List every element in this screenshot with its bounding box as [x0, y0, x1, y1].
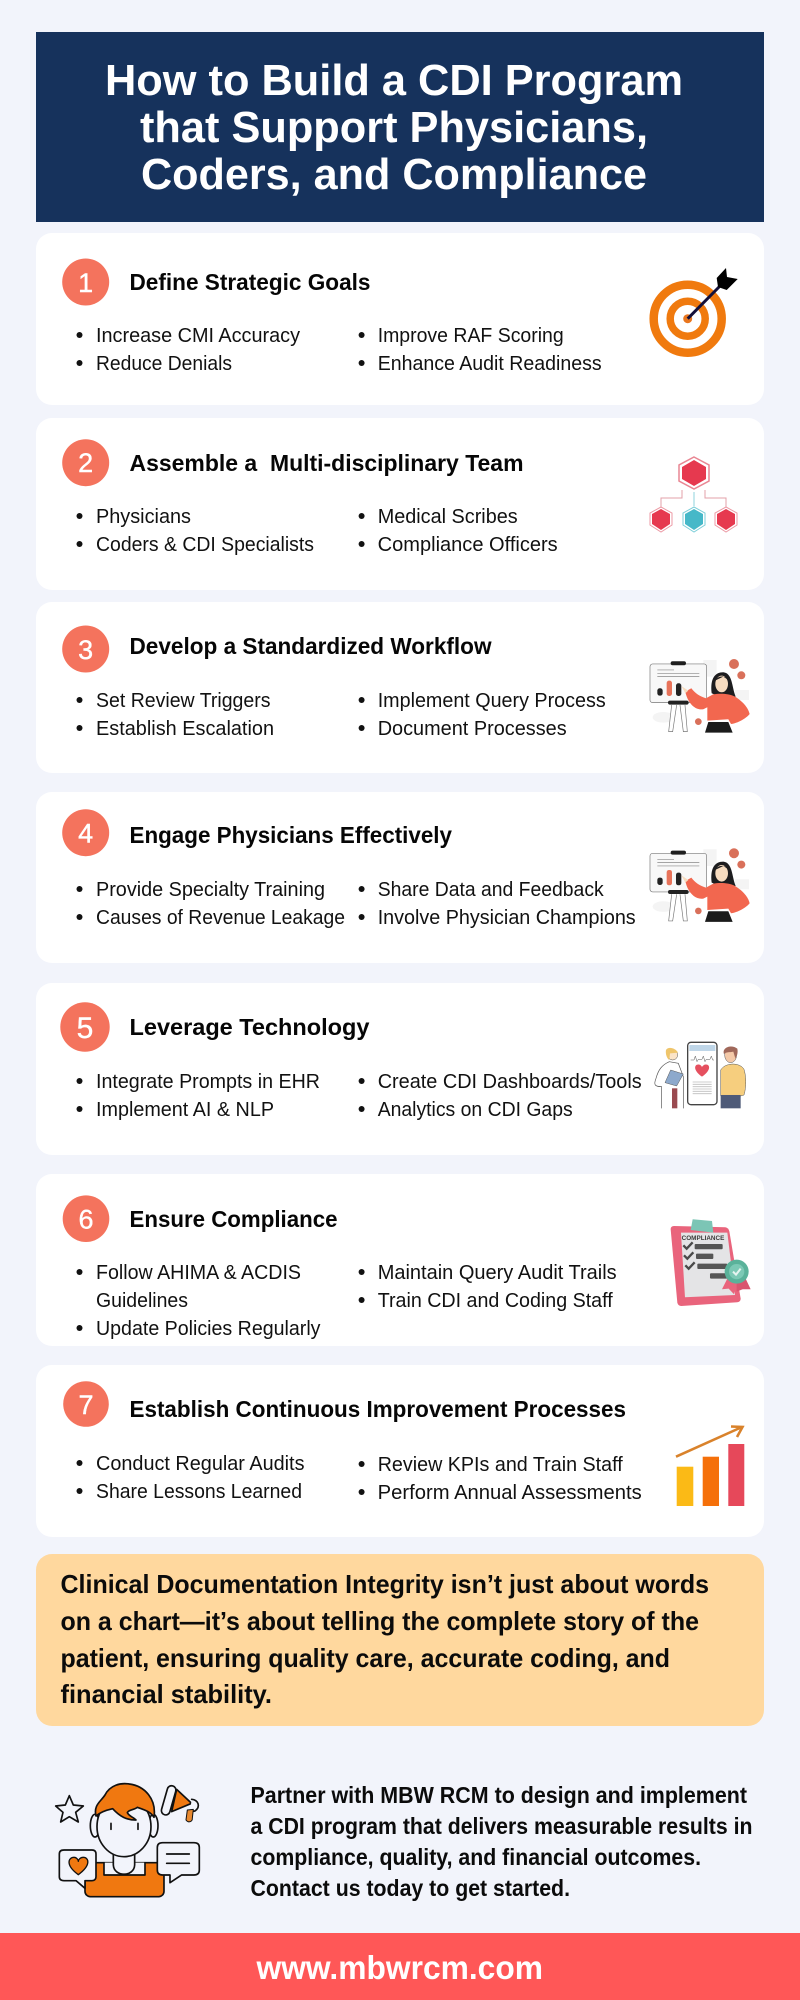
bullet list: step 2: Coders & CDI Specialists [96, 534, 314, 556]
number badge 3 [62, 626, 109, 672]
bullet list: step 1: Enhance Audit Readiness [378, 353, 602, 375]
bullet list: step 4 [76, 879, 636, 929]
bullet list: step 5: Implement AI & NLP [96, 1099, 274, 1121]
icon: doctor and patient with EHR phone [655, 1042, 746, 1108]
bullet list: step 1: Improve RAF Scoring [378, 325, 564, 347]
bullet list: step 4: Causes of Revenue Leakage [96, 907, 345, 929]
icon: presenter at chart board [650, 848, 750, 922]
title banner: Coders, and Compliance [141, 150, 647, 199]
number badge 1 [62, 258, 109, 306]
bullet list: step 4: Provide Specialty Training [96, 879, 325, 901]
number badge 2 [62, 439, 109, 486]
bullet list: step 5 [76, 1071, 642, 1121]
number badge 5 [60, 1002, 110, 1052]
number badge 6 [63, 1195, 109, 1242]
number badge 5: 5 [77, 1012, 93, 1045]
panel: step 1 define strategic goals [36, 233, 764, 405]
number badge 3: 3 [78, 635, 93, 665]
heading: step 7: Establish Continuous Improvement Processes [130, 1396, 626, 1422]
number badge 4 [62, 809, 109, 856]
bullet list: step 2: Physicians [96, 506, 191, 528]
bullet list: step 6: Guidelines [96, 1290, 188, 1312]
bullet list: step 7: Perform Annual Assessments [378, 1482, 642, 1504]
call to action text: Partner with MBW RCM to design and implement [250, 1782, 747, 1808]
icon: presenter at chart board [650, 659, 750, 733]
call to action text: Contact us today to get started. [250, 1875, 570, 1901]
bullet list: step 7: Review KPIs and Train Staff [378, 1454, 623, 1476]
bullet list: step 4: Involve Physician Champions [378, 907, 636, 929]
bullet list: step 5: Analytics on CDI Gaps [378, 1099, 573, 1121]
call to action text [250, 1782, 752, 1901]
icon: compliance clipboard with medal: COMPLIANCE [682, 1235, 724, 1242]
number badge 6: 6 [78, 1205, 94, 1235]
icon: person with speech bubbles and megaphone [56, 1784, 199, 1897]
callout: CDI quote [36, 1554, 764, 1726]
bullet list: step 6 [76, 1262, 617, 1340]
heading: step 6: Ensure Compliance [130, 1206, 338, 1232]
panel: step 3 standardized workflow [36, 602, 764, 773]
bullet list: step 7: Conduct Regular Audits [96, 1453, 304, 1475]
bullet list: step 1: Reduce Denials [96, 353, 232, 375]
bullet list: step 5: Create CDI Dashboards/Tools [378, 1071, 642, 1093]
bullet list: step 1 [76, 325, 602, 375]
callout: CDI quote: Clinical Documentation Integrity isn’t just about words [60, 1569, 709, 1599]
panel: step 6 ensure compliance [36, 1174, 764, 1346]
icon: rising bar chart with arrow [676, 1426, 744, 1506]
heading: step 4: Engage Physicians Effectively [130, 822, 452, 848]
bullet list: step 1: Increase CMI Accuracy [96, 325, 300, 347]
number badge 4: 4 [78, 819, 93, 849]
panel: step 2 assemble team [36, 418, 764, 590]
bullet list: step 3: Set Review Triggers [96, 690, 270, 712]
icon: compliance clipboard with medal [671, 1219, 751, 1306]
footer bar with website [0, 1933, 800, 2000]
call to action text: a CDI program that delivers measurable results in [250, 1813, 752, 1839]
panel: step 7 continuous improvement [36, 1365, 764, 1537]
icon: hexagon org network [650, 457, 737, 532]
heading: step 3: Develop a Standardized Workflow [130, 633, 492, 659]
title banner: How to Build a CDI Program [105, 56, 683, 105]
panel: step 5 leverage technology [36, 983, 764, 1155]
bullet list: step 3 [76, 690, 606, 740]
icon: target with dart [654, 268, 738, 353]
footer bar with website: www.mbwrcm.com [256, 1949, 543, 1986]
number badge 2: 2 [78, 448, 93, 478]
bullet list: step 3: Establish Escalation [96, 718, 274, 740]
bullet list: step 7: Share Lessons Learned [96, 1481, 302, 1503]
bullet list: step 3: Document Processes [378, 718, 567, 740]
callout: CDI quote: patient, ensuring quality care, accurate coding, and [60, 1643, 670, 1673]
title banner [36, 32, 764, 222]
bullet list: step 3: Implement Query Process [378, 690, 606, 712]
heading: step 5: Leverage Technology [130, 1014, 370, 1040]
bullet list: step 6: Update Policies Regularly [96, 1318, 320, 1340]
bullet list: step 2 [76, 506, 558, 556]
call to action text: compliance, quality, and financial outcomes. [250, 1844, 701, 1870]
bullet list: step 6: Train CDI and Coding Staff [378, 1290, 613, 1312]
bullet list: step 4: Share Data and Feedback [378, 879, 605, 901]
bullet list: step 2: Medical Scribes [378, 506, 518, 528]
bullet list: step 2: Compliance Officers [378, 534, 558, 556]
number badge 7: 7 [78, 1390, 94, 1420]
bullet list: step 6: Maintain Query Audit Trails [378, 1262, 617, 1284]
bullet list: step 6: Follow AHIMA & ACDIS [96, 1262, 301, 1284]
number badge 1: 1 [78, 268, 93, 298]
callout: CDI quote: on a chart—it’s about telling the complete story of the [60, 1606, 699, 1636]
callout: CDI quote: financial stability. [60, 1679, 272, 1709]
title banner: that Support Physicians, [140, 103, 648, 152]
bullet list: step 7 [76, 1453, 642, 1504]
bullet list: step 5: Integrate Prompts in EHR [96, 1071, 320, 1093]
number badge 7 [63, 1381, 109, 1427]
heading: step 2: Assemble a Multi-disciplinary Team [130, 450, 524, 476]
heading: step 1: Define Strategic Goals [130, 269, 370, 295]
panel: step 4 engage physicians [36, 792, 764, 963]
